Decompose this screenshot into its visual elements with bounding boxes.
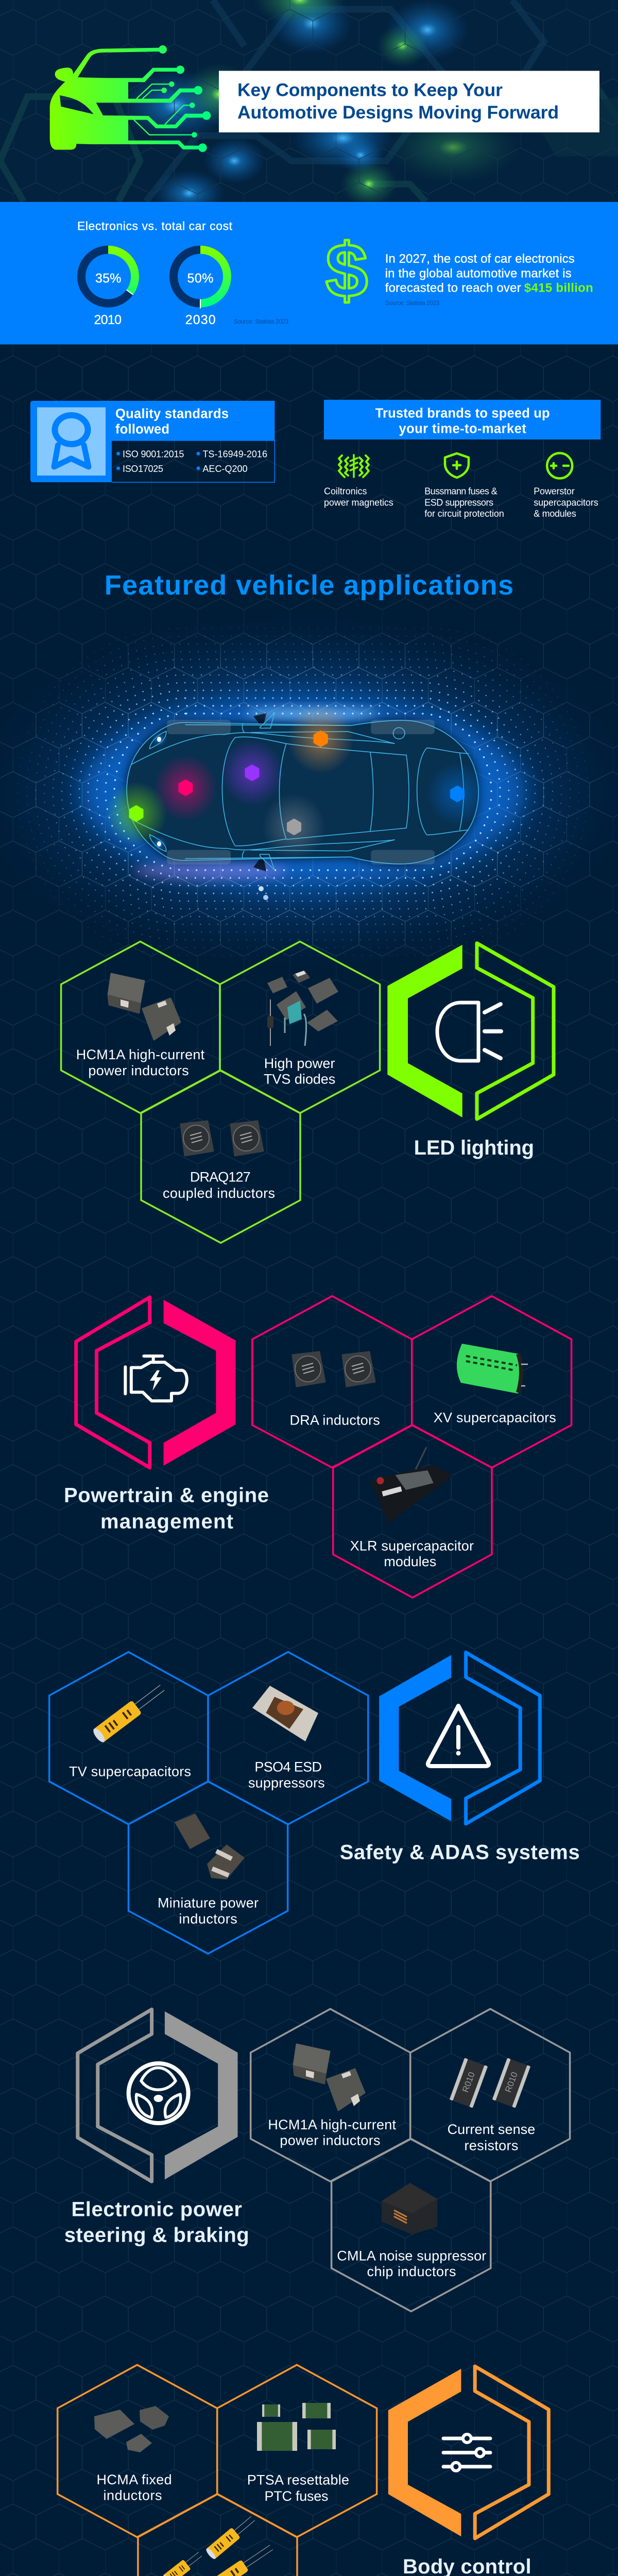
- card: CMLA: chip inductors: [367, 2264, 456, 2279]
- card: CMLA: CMLA noise suppressor: [337, 2248, 486, 2263]
- card: TV supercapacitors: TV supercapacitors: [69, 1764, 191, 1780]
- icon frame: powertrain: [76, 1297, 236, 1468]
- forecast text: $415 billion: [524, 281, 593, 295]
- dot rings: [18, 629, 588, 955]
- location markers: [105, 704, 488, 860]
- card: DRAQ127: DRAQ127: [190, 1170, 251, 1185]
- card: TV supercapacitors: [49, 1652, 208, 1824]
- card: XLR modules: XLR supercapacitor: [350, 1538, 474, 1553]
- card: TVS diodes: High power: [264, 1056, 335, 1071]
- icon: plus minus circle: [547, 453, 572, 478]
- card: miniature power inductors: Miniature power: [158, 1895, 259, 1911]
- panel: electronics cost band: [0, 202, 618, 344]
- card: DRAQ127: [141, 1071, 300, 1243]
- heading: Electronic power: [71, 2198, 242, 2221]
- icon frame: steering: [78, 2009, 238, 2181]
- card: current sense resistors: Current sense: [448, 2122, 535, 2137]
- header background glows: [0, 0, 618, 216]
- standards list: ISO 9001:2015: [123, 449, 184, 460]
- card: CMLA: [332, 2139, 491, 2311]
- standards list: AEC-Q200: [202, 464, 248, 474]
- icon: warning triangle: [428, 1706, 489, 1766]
- label: bussmann: Bussmann fuses &: [424, 486, 497, 497]
- card: PSO4 ESD: [208, 1652, 368, 1824]
- card: DRAQ127: coupled inductors: [163, 1185, 275, 1201]
- donut chart: 2010: 2010: [94, 313, 122, 327]
- heading: quality standards: [115, 407, 229, 437]
- card: current sense resistors: [410, 2009, 570, 2181]
- icon: steering wheel: [129, 2063, 188, 2123]
- icon: engine: [125, 1356, 187, 1401]
- standards list: [116, 449, 267, 474]
- heading: management: [100, 1511, 233, 1533]
- card: HCMA: HCMA fixed: [97, 2472, 172, 2487]
- icon: circuit car: [50, 45, 211, 152]
- icon: headlight: [437, 1003, 501, 1061]
- label: bussmann: for circuit protection: [424, 509, 504, 519]
- card: PTSA: PTC fuses: [265, 2488, 329, 2504]
- headlights: [151, 731, 268, 900]
- card: HCM1A: [251, 2009, 410, 2181]
- card: HCM1A: HCM1A high-current: [268, 2117, 396, 2132]
- title box: Key Components to Keep Your: [237, 80, 503, 100]
- heading: steering & braking: [64, 2224, 249, 2246]
- card: HCMA: [58, 2365, 217, 2537]
- section: power steering and braking: [64, 2009, 570, 2311]
- card: DRA inductors: DRA inductors: [289, 1413, 380, 1428]
- icon frame: LED: [387, 943, 554, 1119]
- label: coiltronics: power magnetics: [324, 497, 393, 507]
- card: miniature power inductors: inductors: [179, 1911, 237, 1927]
- icon frame: body control: [388, 2366, 548, 2538]
- heading: trusted brands: your time-to-market: [399, 421, 526, 436]
- heading: [64, 2198, 249, 2246]
- heading: quality standards: followed: [115, 422, 169, 437]
- icon frame: safety: [379, 1652, 540, 1824]
- card: PTSA: PTSA resettable: [247, 2472, 349, 2488]
- panel: quality standards: [30, 401, 274, 482]
- card: TVS diodes: TVS diodes: [264, 1072, 335, 1087]
- donut chart: 2010: [81, 250, 135, 327]
- source note: Source: Statista 2023: [234, 319, 288, 325]
- card: HCM1A: [61, 942, 220, 1113]
- donut chart: 2030: 50%: [187, 271, 213, 285]
- standards list: ISO17025: [123, 464, 163, 474]
- card: HCM1A: HCM1A high-current: [76, 1047, 205, 1062]
- heading: [64, 1484, 269, 1533]
- label: bussmann: [424, 486, 504, 519]
- card: XLR modules: [333, 1425, 492, 1598]
- label: bussmann: ESD suppressors: [424, 497, 493, 507]
- forecast text: forecasted to reach over: [385, 281, 521, 295]
- forecast text: in the global automotive market is: [385, 266, 572, 280]
- label: powerstor: Powerstor: [534, 486, 575, 497]
- card: PTSA: [217, 2365, 377, 2537]
- donut chart: 2010: 35%: [95, 271, 122, 285]
- label: powerstor: [534, 486, 598, 519]
- panel: trusted brands: [324, 400, 600, 519]
- card: HCMA: inductors: [103, 2487, 162, 2503]
- label: powerstor: supercapacitors: [534, 497, 598, 507]
- icon: coil: [339, 455, 369, 477]
- label: powerstor: & modules: [534, 509, 576, 519]
- heading: Powertrain & engine: [64, 1484, 269, 1507]
- heading: electronics vs total car cost: Electronics vs. total car cost: [77, 219, 233, 233]
- section: body control: [58, 2365, 548, 2576]
- car illustration: [0, 628, 607, 956]
- icon: ribbon: [54, 415, 89, 467]
- heading: featured vehicle applications: Featured vehicle applications: [105, 570, 513, 601]
- section: powertrain: [64, 1296, 572, 1598]
- forecast text: [385, 252, 593, 295]
- icon: dollar: $: [325, 228, 368, 313]
- card: DRA inductors: [252, 1296, 412, 1468]
- title box: [219, 71, 599, 132]
- card: XV supercapacitors: [412, 1296, 572, 1468]
- heading: LED lighting: [414, 1137, 534, 1159]
- icon: shield: [445, 453, 469, 478]
- donut chart: 2030: [174, 250, 227, 327]
- section: safety and ADAS: [49, 1652, 580, 1954]
- heading: trusted brands: [375, 406, 550, 436]
- heading: trusted brands: Trusted brands to speed up: [375, 406, 550, 420]
- card: HCM1A: power inductors: [280, 2132, 380, 2148]
- source note: Source: Statista 2023: [385, 300, 439, 307]
- card: current sense resistors: resistors: [465, 2138, 518, 2153]
- card: PSO4 ESD: PSO4 ESD: [254, 1759, 322, 1774]
- section: LED lighting: [61, 942, 554, 1243]
- card: miniature power inductors: [129, 1782, 288, 1954]
- standards list: TS-16949-2016: [202, 449, 267, 460]
- card: XV supercapacitors: XV supercapacitors: [434, 1410, 556, 1425]
- heading: Safety & ADAS systems: [340, 1841, 580, 1863]
- card: HCM1A: power inductors: [88, 1063, 189, 1078]
- card: XLR modules: modules: [384, 1554, 436, 1569]
- title box: Automotive Designs Moving Forward: [237, 102, 559, 123]
- heading: quality standards: Quality standards: [115, 407, 229, 421]
- label: coiltronics: [324, 486, 393, 507]
- forecast text: In 2027, the cost of car electronics: [385, 252, 575, 266]
- donut chart: 2030: 2030: [185, 313, 216, 327]
- card: TVA: [138, 2494, 297, 2576]
- icon: sliders: [443, 2434, 490, 2471]
- card: PSO4 ESD: suppressors: [248, 1775, 325, 1791]
- label: coiltronics: Coiltronics: [324, 486, 367, 497]
- car body: [127, 713, 478, 872]
- card: TVS diodes: [220, 942, 380, 1113]
